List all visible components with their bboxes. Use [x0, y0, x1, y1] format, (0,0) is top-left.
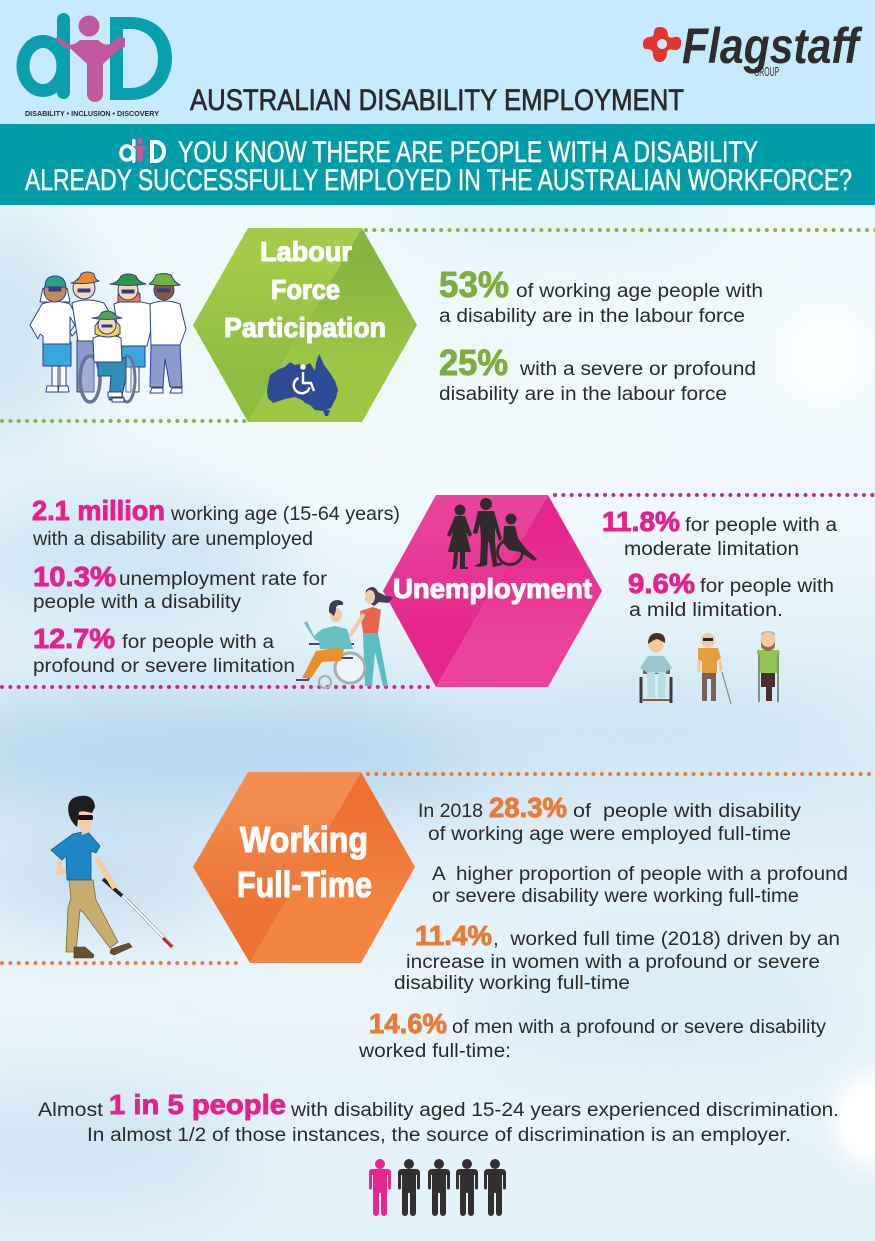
stat 10.3%: 10.3% — [33, 561, 116, 592]
heading text: Unemployment — [393, 573, 592, 604]
stat 9.6%: a mild limitation. — [629, 600, 783, 621]
heading text — [237, 819, 372, 905]
stat 11.4%: 11.4% — [415, 920, 492, 951]
stat 10.3%: people with a disability — [33, 592, 242, 613]
stat 53%: 53% — [439, 264, 509, 305]
stat 12.7%: 12.7% — [33, 623, 115, 654]
text: discrimination statement: Almost — [38, 1100, 104, 1121]
stat 9.6%: for people with — [700, 576, 834, 597]
stat 53%: of working age people with — [516, 281, 763, 302]
stat 28.3%: of working age were employed full-time — [428, 824, 791, 845]
silhouette man — [473, 498, 502, 567]
stat 28.3% — [418, 792, 802, 845]
person dark 2 — [428, 1159, 450, 1216]
stat 11.4%: increase in women with a profound or severe — [406, 952, 820, 973]
stat 14.6%: of men with a profound or severe disability — [452, 1017, 827, 1038]
person 1 — [30, 276, 81, 392]
pink dotted lines — [2, 495, 875, 687]
stat 11.8%: 11.8% — [602, 506, 680, 537]
logo: Flagstaff Group: GROUP — [754, 64, 779, 79]
heading text: Labour — [260, 236, 352, 267]
man with crutches — [757, 631, 780, 702]
illustration: three people with disabilities — [640, 631, 780, 704]
text: discrimination statement: with disability aged 15-24 years experienced discrimination. — [290, 1100, 839, 1121]
stat 2.1 million: 2.1 million — [32, 495, 165, 526]
illustration: man with white cane — [51, 796, 174, 958]
text: discrimination statement — [38, 1089, 839, 1146]
hexagon: Labour Force Participation — [193, 228, 417, 422]
blind man with cane — [698, 633, 731, 704]
stat 10.3% — [33, 561, 328, 613]
icon row: 1 in 5 people — [369, 1159, 506, 1216]
heading text — [224, 236, 386, 343]
stat 11.8%: for people with a — [685, 515, 837, 536]
stat 11.8% — [602, 506, 837, 560]
person dark 3 — [456, 1159, 478, 1216]
silhouette woman — [447, 504, 472, 569]
higher proportion note: or severe disability were working full-time — [432, 886, 799, 907]
header background — [0, 0, 875, 124]
text: unemployment right stats — [602, 506, 837, 621]
text: unemployment left stats — [32, 495, 400, 677]
illustration: carer pushing wheelchair — [296, 587, 394, 688]
stat 2.1 million: with a disability are unemployed — [32, 529, 313, 550]
person 4 — [149, 274, 186, 393]
text: working full-time stats — [358, 792, 848, 1062]
green dotted lines — [2, 230, 875, 421]
stat 14.6%: 14.6% — [369, 1008, 447, 1039]
shirt — [51, 831, 100, 880]
person in wheelchair — [80, 311, 135, 402]
heading text: Full-Time — [237, 864, 372, 905]
stat 10.3%: unemployment rate for — [119, 569, 328, 590]
man in wheelchair — [640, 633, 672, 703]
shoes — [74, 943, 132, 958]
stat 28.3%: In 2018 — [418, 801, 483, 822]
higher proportion note: A higher proportion of people with a profound — [432, 864, 848, 885]
stat 25%: disability are in the labour force — [439, 384, 727, 405]
stat 11.4% — [394, 920, 840, 994]
person pink — [369, 1159, 391, 1216]
silhouette wheelchair user — [498, 514, 537, 564]
teal banner — [0, 124, 875, 205]
woman carer — [350, 587, 394, 686]
head — [80, 822, 90, 835]
orange dotted lines — [2, 774, 875, 963]
stat 2.1 million — [32, 495, 400, 550]
stat 53%: a disability are in the labour force — [439, 306, 745, 327]
stat 12.7%: for people with a — [122, 632, 274, 653]
text: discrimination statement: 1 in 5 people — [109, 1089, 286, 1120]
stat 12.7%: profound or severe limitation — [33, 656, 295, 677]
stat 14.6% — [358, 1008, 827, 1062]
heading text: Force — [271, 274, 340, 305]
person dark 4 — [484, 1159, 506, 1216]
stat 14.6%: worked full-time: — [358, 1041, 511, 1062]
illustration: team with wheelchair user — [30, 272, 186, 402]
trousers — [66, 880, 118, 952]
hexagon: Unemployment — [383, 495, 602, 687]
stat 9.6% — [628, 568, 834, 621]
stat 11.8%: moderate limitation — [624, 539, 799, 560]
stat 25% — [439, 342, 756, 405]
text: labour force stats — [439, 264, 763, 405]
banner logo — [121, 138, 166, 163]
stat 28.3%: of people with disability — [573, 801, 802, 822]
stat 2.1 million: working age (15-64 years) — [170, 504, 400, 525]
person 3 — [110, 274, 155, 392]
logo: dID — [23, 13, 172, 118]
heading text: Working — [240, 819, 368, 860]
arms — [59, 858, 86, 872]
stat 12.7% — [33, 623, 295, 677]
icon: silhouettes of people — [447, 498, 537, 569]
icon: Australia map with wheelchair symbol — [267, 354, 338, 416]
person dark 1 — [398, 1159, 420, 1216]
stat 11.4%: , worked full time (2018) driven by an — [493, 929, 840, 950]
cane — [105, 881, 174, 948]
higher proportion note — [432, 864, 848, 907]
hexagon: Working Full-Time — [193, 772, 415, 963]
stat 11.4%: disability working full-time — [394, 973, 630, 994]
stat 9.6%: 9.6% — [628, 568, 695, 599]
title: AUSTRALIAN DISABILITY EMPLOYMENT — [190, 84, 684, 117]
person 2 — [71, 272, 112, 392]
text: discrimination statement: In almost 1/2 of those instances, the source of discrimination is an employer. — [87, 1125, 791, 1146]
stat 28.3%: 28.3% — [489, 792, 567, 823]
heading text: Participation — [224, 312, 386, 343]
stat 53% — [439, 264, 763, 327]
logo: dID: DISABILITY • INCLUSION • DISCOVERY — [25, 111, 159, 118]
stat 25%: with a severe or profound — [519, 359, 756, 380]
stat 25%: 25% — [439, 342, 508, 383]
wheelchair and man — [296, 600, 365, 688]
